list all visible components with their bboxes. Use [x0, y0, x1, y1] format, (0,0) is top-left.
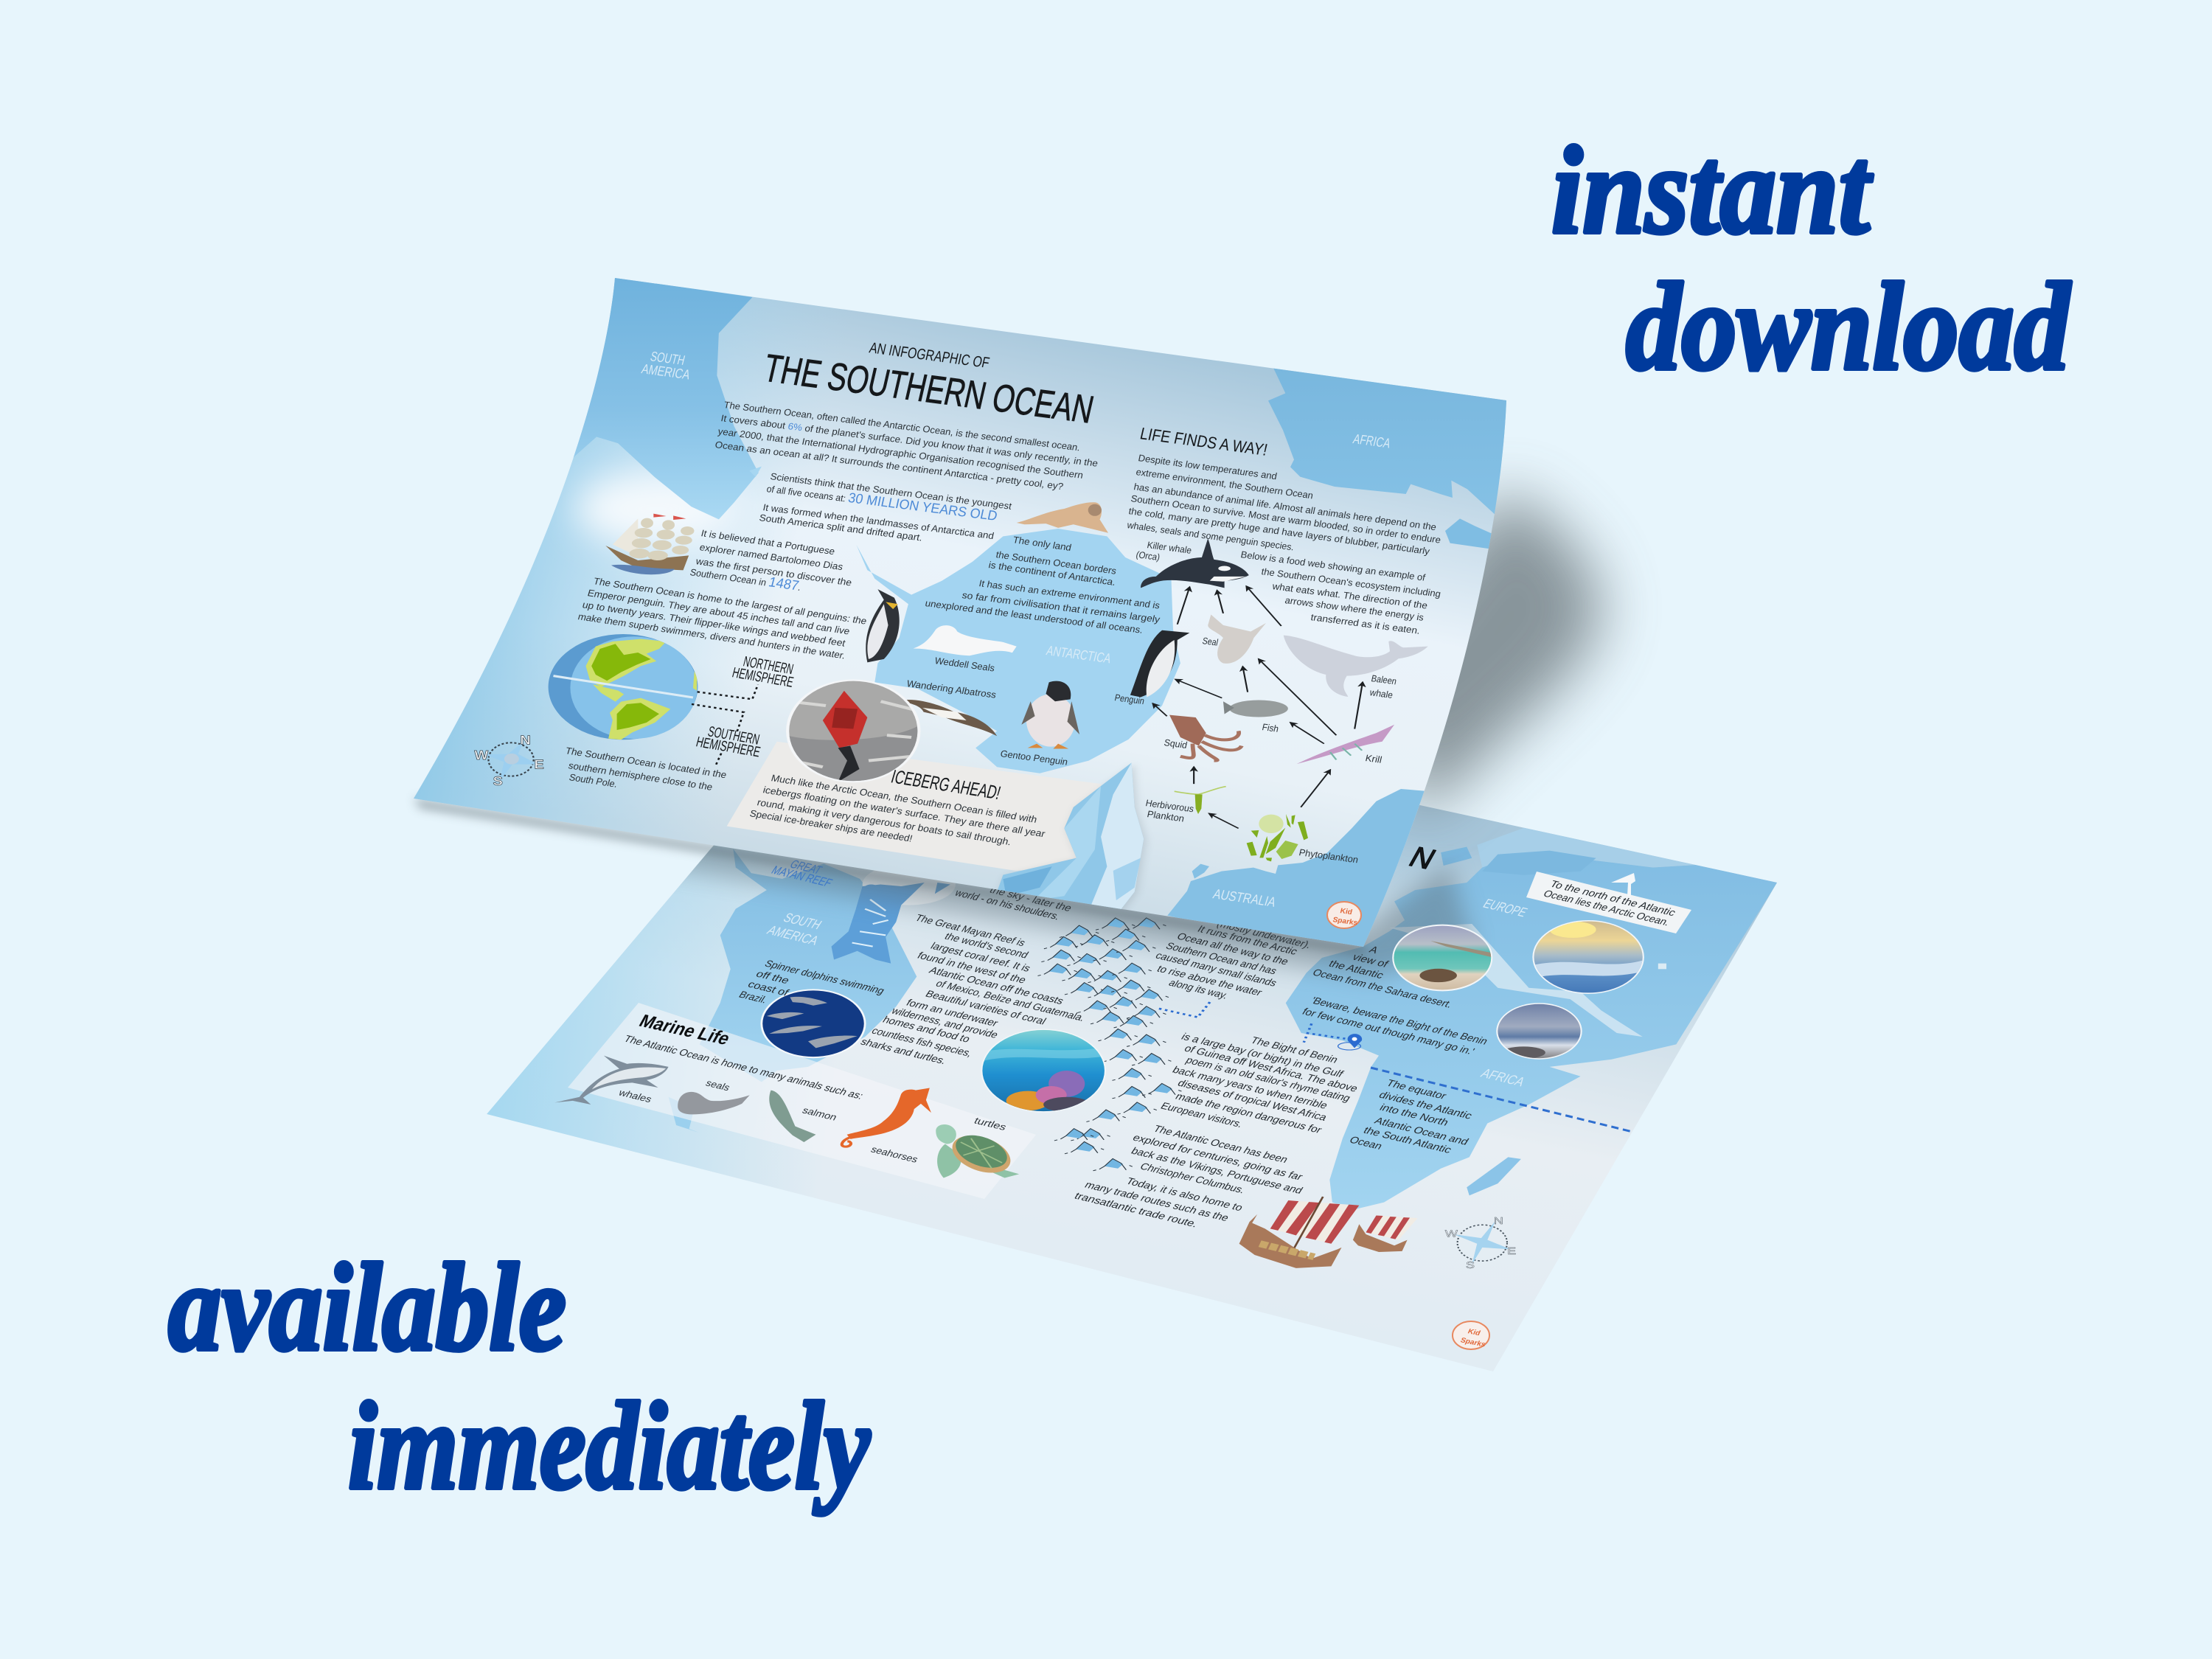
emperor penguin: [866, 589, 900, 662]
labels: animals: Herbivorous: [1144, 797, 1195, 814]
labels: animals: Plankton: [1146, 808, 1186, 824]
text: Great Mayan Reef paragraph: homes and food to: [880, 1015, 973, 1045]
shadow: under top sheet edge: [414, 799, 1368, 956]
labels: South America, Africa, Antarctica, Australia: AMERICA: [640, 362, 692, 383]
text: Bight of Benin rhyme: 'Beware, beware the Bight of the Benin: [1309, 995, 1489, 1047]
text: Sahara caption: A: [1367, 945, 1380, 956]
text: Mid-Atlantic Ridge paragraph: [1153, 919, 1313, 1001]
animals: marine life illustrations: [554, 1056, 1020, 1180]
text: Bight of Benin paragraph: is a large bay (or bight) in the Gulf: [1179, 1032, 1345, 1079]
icon: compass rose (top sheet): E: [534, 757, 544, 771]
illustrations: plankton: [1175, 787, 1308, 861]
map: Africa and Europe land: [1286, 811, 1777, 1210]
text: life finds a way paragraph: whales, seals and some penguin species.: [1125, 519, 1295, 552]
labels: marine animals: salmon: [801, 1105, 839, 1122]
text: only land paragraph: is the continent of Antarctica.: [987, 559, 1117, 588]
labels: animals: (Orca): [1135, 549, 1161, 563]
icon: compass rose (bottom sheet): N: [1494, 1216, 1503, 1227]
illustration: walrus: [1017, 502, 1108, 533]
seahorse: [842, 1088, 931, 1147]
text: Bight of Benin paragraph: diseases of tropical West Africa: [1175, 1078, 1329, 1123]
labels: marine animals: [616, 1078, 1009, 1165]
icon: compass rose (bottom sheet): W: [1445, 1229, 1458, 1239]
text: Emperor penguin paragraph: make them superb swimmers, divers and hunters in the water.: [577, 611, 846, 661]
text: Emperor penguin paragraph: The Southern Ocean is home to the largest of all penguins: the: [592, 576, 868, 627]
illustrations: Antarctic animals: [866, 589, 1079, 749]
text: equator paragraph: into the North: [1377, 1102, 1450, 1128]
text: equator paragraph: The equator: [1384, 1078, 1449, 1102]
text: Sahara caption: [1310, 945, 1454, 1010]
text: youngest ocean paragraph: South America split and drifted apart.: [758, 512, 924, 543]
text: equator paragraph: Ocean: [1347, 1135, 1384, 1152]
herbivorous plankton: [1175, 787, 1226, 814]
text: exploration paragraph: explored for centuries, going as far: [1130, 1133, 1305, 1183]
connector lines and hemisphere labels: HEMISPHERE: [695, 734, 762, 760]
text: Bight of Benin paragraph: of Guinea off West Africa. The above: [1182, 1043, 1360, 1094]
text: Atlas caption: the sky - later the: [987, 885, 1074, 914]
fish: [1223, 700, 1288, 717]
labels: animals: Wandering Albatross: [905, 678, 998, 700]
text: Great Mayan Reef paragraph: largest coral reef. It is: [928, 941, 1032, 974]
labels: animals: Baleen: [1370, 672, 1398, 686]
text: exploration paragraph: The Atlantic Ocean has been: [1151, 1124, 1290, 1166]
text: only land paragraph: The only land: [1012, 534, 1073, 553]
labels: animals: Krill: [1364, 752, 1383, 765]
text: intro paragraph: Ocean as an ocean at all? It surrounds the continent Antarctica - pretty cool, ey?: [714, 439, 1065, 492]
illustration: sailing ship: [605, 514, 694, 574]
text: Great Mayan Reef paragraph: Beautiful varieties of coral: [923, 989, 1048, 1027]
text: only land paragraph: It has such an extreme environment and is: [978, 577, 1161, 611]
text: exploration paragraph: Today, it is also home to: [1124, 1176, 1245, 1214]
text: Emperor penguin paragraph: [577, 576, 868, 661]
labels: animals: Squid: [1163, 737, 1189, 751]
labels: animals: Weddell Seals: [933, 655, 996, 673]
logo: Kid Sparks (top sheet): Sparks: [1332, 916, 1359, 928]
labels: Europe and Africa: [1478, 897, 1530, 1090]
squid: [1169, 715, 1242, 761]
text: food web paragraph: what eats what. The direction of the: [1270, 580, 1428, 611]
photo: spinner dolphins: [757, 988, 870, 1060]
text: Great Mayan Reef paragraph: sharks and turtles.: [858, 1037, 948, 1067]
connector lines and hemisphere labels: NORTHERN: [742, 654, 795, 678]
photos: views of the Atlantic: [1392, 920, 1645, 1060]
labels: marine animals: turtles: [973, 1116, 1009, 1133]
labels: marine animals: whales: [616, 1087, 654, 1105]
label: South America: [766, 913, 822, 945]
text: only land paragraph: [924, 534, 1161, 636]
label: Great Mayan Reef: MAYAN REEF: [769, 863, 835, 889]
labels: marine animals: seahorses: [869, 1144, 920, 1165]
text: Great Mayan Reef paragraph: The Great Mayan Reef is: [913, 913, 1027, 949]
map: Australia land: [1167, 725, 1462, 959]
map: South America land: [551, 277, 762, 519]
whale: [554, 1056, 669, 1105]
callout: north of the Atlantic: [1526, 872, 1691, 933]
title: An infographic of: AN INFOGRAPHIC OF: [868, 340, 991, 372]
text: food web paragraph: arrows show where the energy is: [1284, 594, 1425, 623]
text: equator paragraph: Atlantic Ocean and: [1372, 1116, 1471, 1147]
text: Bartolomeu Dias paragraph: was the first person to discover the: [694, 555, 853, 588]
text: Sahara caption: Ocean from the Sahara desert.: [1310, 967, 1454, 1010]
title fragment: N of the Atlantic title: N: [1404, 841, 1441, 875]
label: Great Mayan Reef: GREAT: [787, 858, 825, 877]
text: intro paragraph: [714, 399, 1099, 492]
text: intro paragraph: year 2000, that the International Hydrographic Organisation recognised the Southern: [717, 425, 1085, 481]
map: Africa land: [1268, 367, 1509, 549]
salmon: [769, 1091, 815, 1142]
krill: [1296, 725, 1394, 764]
text: Bight of Benin paragraph: back many years to when terrible: [1170, 1065, 1330, 1111]
text: exploration paragraph: back as the Vikings, Portuguese and: [1129, 1146, 1305, 1197]
heading: available immediately: [168, 1238, 870, 1515]
logo: Kid Sparks (top sheet): [1327, 902, 1361, 928]
heading: instant download: [1551, 121, 2072, 396]
text: Bight of Benin paragraph: The Bight of Benin: [1248, 1035, 1340, 1065]
icon: compass rose (top sheet): W: [474, 748, 489, 762]
text: Mid-Atlantic Ridge paragraph: along its way.: [1166, 978, 1230, 1001]
panel: Marine Life: [554, 1003, 1036, 1199]
logo: Kid Sparks (bottom sheet): Kid: [1467, 1328, 1481, 1338]
illustration: baleen whale: [1284, 636, 1428, 697]
icon: compass rose (top sheet): [474, 733, 544, 788]
text: Great Mayan Reef paragraph: form an underwater: [904, 998, 1001, 1029]
orca: [1141, 538, 1249, 588]
Weddell seal: [914, 625, 1017, 655]
text: only land paragraph: unexplored and the least understood of all oceans.: [924, 597, 1144, 636]
title: The Southern Ocean: THE SOUTHERN OCEAN: [759, 347, 1098, 431]
text: iceberg paragraph: [748, 773, 1047, 847]
text: Bartolomeu Dias paragraph: explorer named Bartolomeo Dias: [698, 541, 844, 572]
text: food web paragraph: the Southern Ocean's ecosystem including: [1260, 566, 1441, 599]
text: Great Mayan Reef paragraph: countless fish species,: [869, 1026, 974, 1059]
illustration: globe with hemispheres: [549, 634, 698, 740]
text: Mid-Atlantic Ridge paragraph: It runs from the Arctic: [1195, 924, 1299, 957]
text: equator paragraph: divides the Atlantic: [1377, 1090, 1474, 1121]
gentoo penguin: [1021, 681, 1079, 749]
text: life finds a way paragraph: has an abundance of animal life. Almost all animals here depend on the: [1133, 481, 1437, 532]
labels: South America, Africa, Antarctica, Australia: SOUTH: [649, 349, 686, 369]
text: hemisphere paragraph: southern hemisphere close to the: [567, 760, 714, 793]
text: hemisphere paragraph: The Southern Ocean is located in the: [564, 745, 728, 780]
text: Atlas caption: world - on his shoulders.: [952, 888, 1062, 922]
text: spinner dolphins caption: coast of: [745, 979, 790, 998]
text: youngest ocean paragraph: It was formed when the landmasses of Antarctica and: [762, 501, 995, 541]
text: life finds a way paragraph: Southern Ocean to survive. Most are warm blooded, so in order to endure: [1130, 493, 1441, 546]
illustration: Mid-Atlantic Ridge mountains: [1037, 918, 1181, 1171]
text: Emperor penguin paragraph: Emperor penguin. They are about 45 inches tall and can live: [586, 588, 851, 636]
text: Mid-Atlantic Ridge paragraph: Southern Ocean and has: [1164, 941, 1279, 977]
labels: animals: whale: [1368, 686, 1394, 700]
labels: South America, Africa, Antarctica, Australia: [640, 349, 1392, 911]
labels: Europe and Africa: AFRICA: [1478, 1066, 1528, 1090]
text: intro paragraph: The Southern Ocean, often called the Antarctic Ocean, is the second smallest ocean.: [723, 399, 1082, 453]
labels: marine animals: seals: [704, 1078, 732, 1093]
callout: north of the Atlantic: To the north of the Atlantic: [1548, 879, 1677, 919]
text: Emperor penguin paragraph: up to twenty years. Their flipper-like wings and webbed feet: [581, 599, 847, 649]
label: Great Mayan Reef: [771, 860, 833, 886]
text: Mid-Atlantic Ridge paragraph: to rise above the water: [1155, 964, 1265, 998]
labels: animals: Penguin: [1113, 692, 1146, 706]
illustration: iceberg: [994, 762, 1146, 921]
callout: north of the Atlantic: Ocean lies the Arctic Ocean.: [1541, 888, 1672, 928]
logo: Kid Sparks (bottom sheet): Sparks: [1459, 1337, 1487, 1349]
text: equator paragraph: [1347, 1078, 1474, 1155]
illustrations: food web animals: [1130, 538, 1394, 764]
text: Bartolomeu Dias paragraph: It is believed that a Portuguese: [700, 527, 836, 557]
labels: South America, Africa, Antarctica, Australia: AFRICA: [1352, 432, 1392, 451]
text: only land paragraph: the Southern Ocean borders: [995, 549, 1118, 577]
photo: ice breaker ship: [786, 679, 920, 782]
text: Bartolomeu Dias paragraph: [689, 527, 853, 594]
line: equator: [1371, 1068, 1632, 1132]
text: Bight of Benin paragraph: European visitors.: [1158, 1101, 1245, 1130]
labels: animals: Phytoplankton: [1298, 846, 1360, 865]
text: Great Mayan Reef paragraph: the world's second: [942, 931, 1031, 961]
text: Mid-Atlantic Ridge paragraph: (mostly underwater).: [1214, 919, 1313, 951]
text: iceberg paragraph: Special ice-breaker ships are needed!: [748, 808, 914, 844]
text: Great Mayan Reef paragraph: [858, 913, 1087, 1067]
text: food web paragraph: Below is a food web showing an example of: [1239, 549, 1427, 583]
text: spinner dolphins caption: Brazil.: [737, 990, 769, 1006]
food web penguin: [1130, 630, 1189, 697]
heading: Life finds a way: LIFE FINDS A WAY!: [1138, 424, 1270, 459]
seal: [1208, 615, 1266, 664]
text: Mid-Atlantic Ridge paragraph: Ocean all the way to the: [1175, 931, 1291, 967]
text: Sahara caption: view of: [1350, 952, 1390, 970]
labels: animals: Fish: [1261, 721, 1280, 734]
panel: Atlantic Ocean sheet (back): [487, 805, 1777, 1371]
shadow: top sheet curl: [1371, 490, 1601, 818]
text: iceberg paragraph: icebergs floating on the water's surface. They are there all year: [762, 785, 1047, 839]
text: spinner dolphins caption: off the: [754, 969, 792, 987]
text: youngest ocean paragraph: Scientists think that the Southern Ocean is the youngest: [769, 470, 1013, 512]
panel: Iceberg ahead: [727, 679, 1101, 871]
connector lines and hemisphere labels: HEMISPHERE: [731, 665, 795, 691]
label: South America: SOUTH: [780, 911, 824, 933]
text: Great Mayan Reef paragraph: found in the west of the: [915, 950, 1029, 986]
text: food web paragraph: [1239, 549, 1441, 636]
text: Great Mayan Reef paragraph: Atlantic Ocean off the coasts: [927, 965, 1065, 1007]
text: only land paragraph: so far from civilisation that it remains largely: [961, 589, 1161, 625]
text: Bight of Benin paragraph: made the region dangerous for: [1173, 1091, 1324, 1135]
icon: map pin at the Bight of Benin: [1159, 1001, 1362, 1050]
connector lines and hemisphere labels: SOUTHERN: [706, 724, 761, 748]
map: South America land: [669, 849, 917, 1133]
labels: South America, Africa, Antarctica, Australia: ANTARCTICA: [1045, 644, 1113, 667]
phytoplankton: [1247, 814, 1308, 861]
heading: available immediately: available: [168, 1238, 566, 1377]
text: Bight of Benin paragraph: [1158, 1032, 1360, 1135]
text: Bight of Benin paragraph: poem is an old sailor's rhyme dating: [1183, 1055, 1353, 1104]
logo: Kid Sparks (top sheet): Kid: [1339, 907, 1353, 917]
icon: compass rose (top sheet): S: [493, 773, 503, 788]
panel: Southern Ocean sheet (front): [414, 277, 1509, 959]
text: iceberg paragraph: Much like the Arctic Ocean, the Southern Ocean is filled with: [770, 773, 1038, 825]
seal: [678, 1092, 750, 1114]
icon: compass rose (bottom sheet): E: [1507, 1246, 1516, 1256]
text: youngest ocean paragraph: [758, 470, 1013, 543]
text: life finds a way paragraph: the cold, many are pretty huge and have layers of blubber, particularly: [1127, 505, 1431, 557]
text: Sahara caption: the Atlantic: [1326, 959, 1385, 981]
labels: Europe and Africa: EUROPE: [1480, 897, 1530, 920]
heading: available immediately: immediately: [348, 1377, 870, 1515]
heading: Marine Life: Marine Life: [636, 1012, 734, 1048]
map: Antarctica land: [856, 529, 1180, 773]
albatross: [899, 700, 997, 736]
labels: animals: Killer whale: [1146, 539, 1193, 556]
text: intro paragraph: It covers about 6% of the planet's surface. Did you know that it was only recently, in the: [720, 412, 1099, 469]
shadow cast by top sheet on back sheet: [683, 845, 1481, 987]
heading: instant download: instant: [1551, 121, 1873, 260]
arrows: food web: [1153, 586, 1363, 828]
text: marine intro: The Atlantic Ocean is home to many animals such as:: [622, 1034, 865, 1102]
photo: coral reef: [981, 1029, 1108, 1113]
text: hemisphere paragraph: South Pole.: [568, 772, 619, 790]
text: iceberg paragraph: round, making it very dangerous for boats to sail through.: [756, 797, 1012, 847]
icon: compass rose (top sheet): N: [520, 733, 531, 747]
text: Great Mayan Reef paragraph: of Mexico, Belize and Guatemala.: [933, 978, 1087, 1023]
logo: Kid Sparks (bottom sheet): [1453, 1321, 1489, 1349]
text: Bight of Benin rhyme: for few come out though many go in.': [1300, 1006, 1476, 1057]
heading: Iceberg ahead: ICEBERG AHEAD!: [888, 765, 1004, 804]
text: Bartolomeu Dias paragraph: Southern Ocean in 1487.: [689, 564, 803, 594]
connector lines and hemisphere labels: [692, 654, 795, 765]
illustration: Viking ships: [1239, 1197, 1418, 1268]
text: food web paragraph: transferred as it is eaten.: [1310, 611, 1421, 636]
text: exploration paragraph: many trade routes such as the: [1082, 1180, 1231, 1224]
labels: animals: Seal: [1201, 635, 1220, 648]
heading: instant download: download: [1626, 257, 2072, 396]
text: Mid-Atlantic Ridge paragraph: caused many small islands: [1153, 950, 1279, 989]
arrow: to the north: [1611, 873, 1635, 897]
text: spinner dolphins caption: [739, 960, 885, 1003]
icon: compass rose (bottom sheet): S: [1466, 1260, 1475, 1270]
text: equator paragraph: the South Atlantic: [1361, 1125, 1453, 1155]
text: Great Mayan Reef paragraph: wilderness, and provide: [888, 1006, 1001, 1040]
text: life finds a way paragraph: Despite its low temperatures and: [1137, 452, 1278, 481]
icon: compass rose (bottom sheet): [1445, 1216, 1516, 1270]
turtle: [936, 1124, 1020, 1180]
labels: South America, Africa, Antarctica, Australia: AUSTRALIA: [1211, 887, 1278, 911]
text: youngest ocean paragraph: of all five oceans at: 30 MILLION YEARS OLD: [765, 481, 998, 524]
illustration: Atlas holding the globe: [832, 863, 956, 964]
text: exploration paragraph: transatlantic trade route.: [1072, 1191, 1200, 1230]
text: life finds a way paragraph: [1125, 452, 1441, 557]
text: exploration paragraph: [1072, 1124, 1305, 1230]
label: South America: AMERICA: [764, 923, 821, 948]
labels: animals: Gentoo Penguin: [999, 748, 1069, 768]
text: exploration paragraph: Christopher Columbus.: [1138, 1161, 1247, 1196]
text: spinner dolphins caption: Spinner dolphins swimming: [762, 959, 887, 997]
text: life finds a way paragraph: extreme environment, the Southern Ocean: [1135, 466, 1314, 501]
labels: animals: [905, 539, 1398, 865]
